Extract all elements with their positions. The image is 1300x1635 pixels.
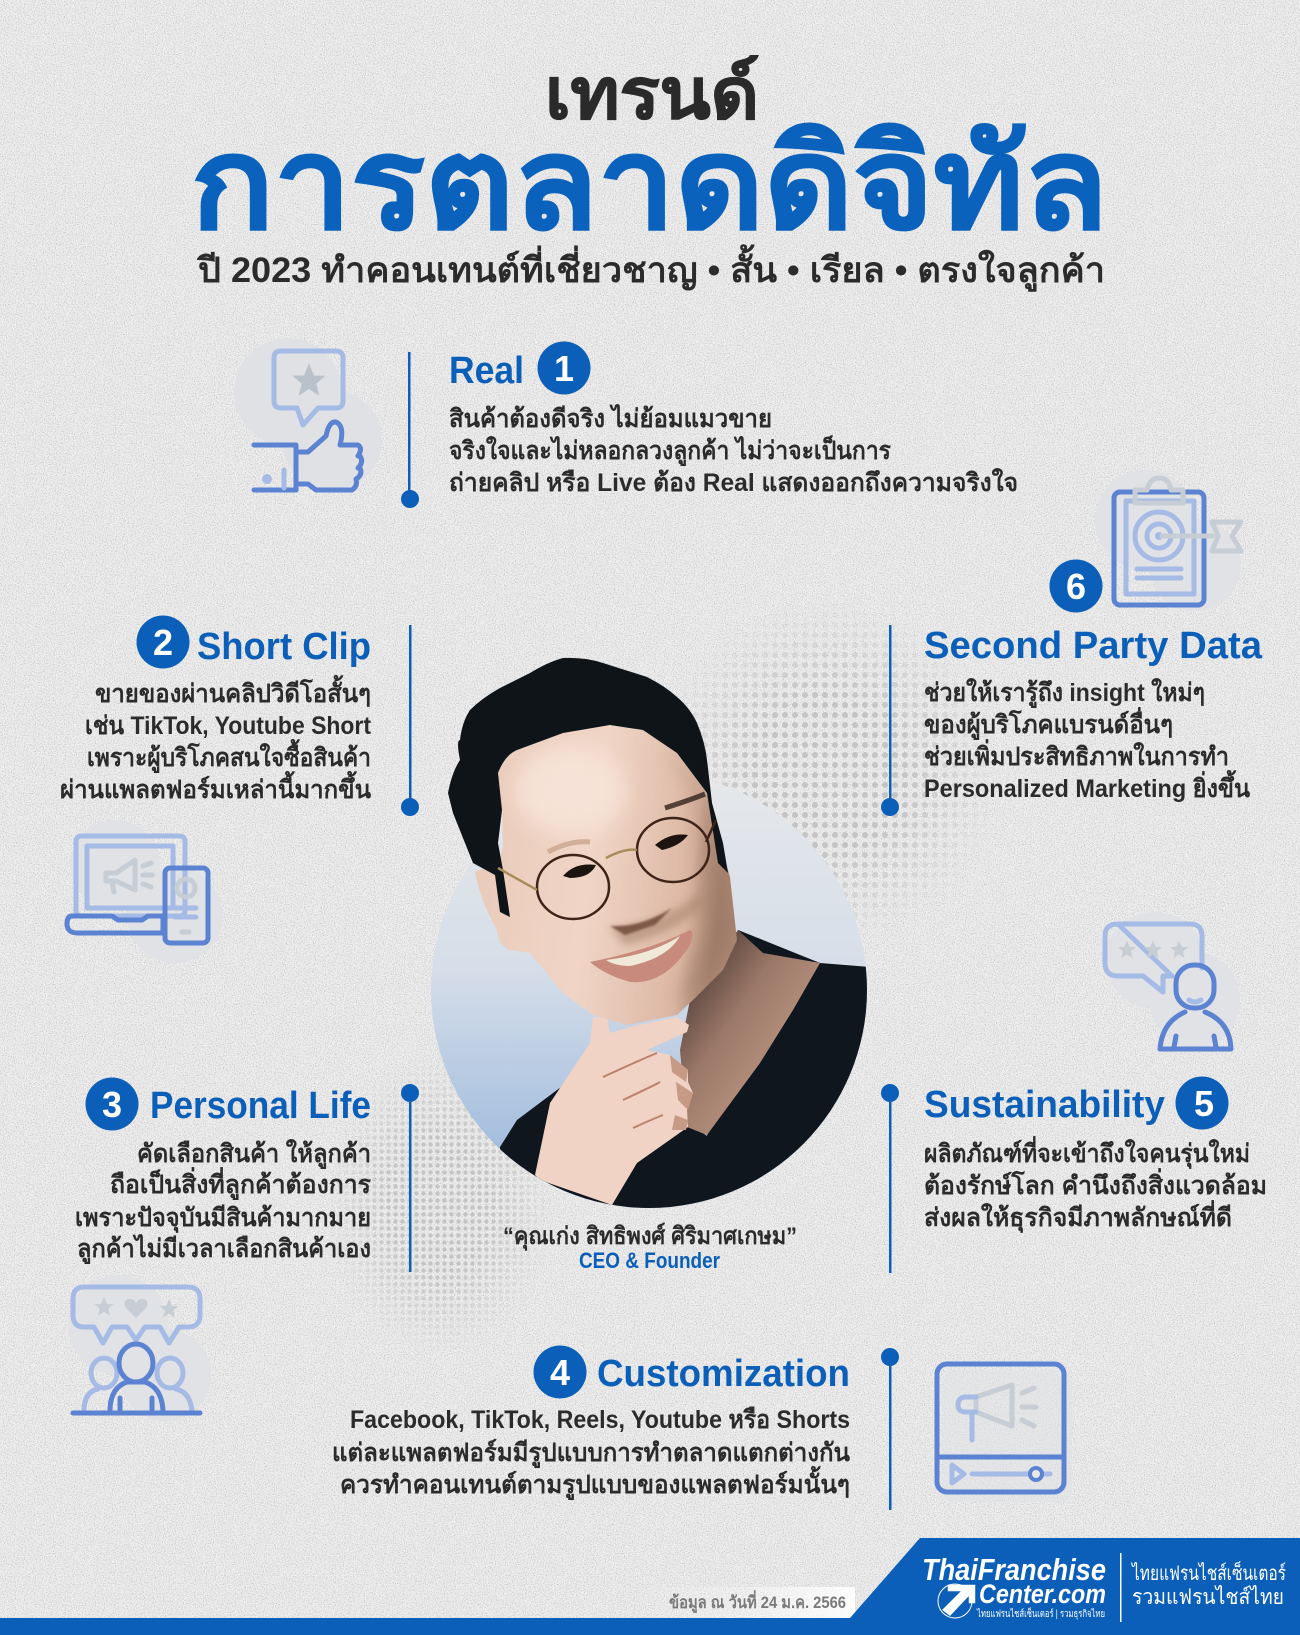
body text: ผ่านแพลตฟอร์มเหล่านี้มากขึ้น — [60, 770, 371, 804]
number badge — [86, 1078, 138, 1130]
source strip — [640, 1587, 855, 1618]
source text: ข้อมูล ณ วันที่ 24 ม.ค. 2566 — [669, 1590, 846, 1614]
body text — [332, 1406, 850, 1501]
photo caption — [503, 1222, 797, 1273]
connector line — [881, 625, 899, 816]
shirt, neck and hand — [500, 930, 870, 1215]
body text — [924, 677, 1250, 803]
body text: ต้องรักษ์โลก คำนึงถึงสิ่งแวดล้อม — [924, 1168, 1267, 1200]
heading: Sustainability — [924, 1084, 1165, 1126]
body text: ผลิตภัณฑ์ที่จะเข้าถึงใจคนรุ่นใหม่ — [924, 1136, 1250, 1170]
footer band — [0, 1538, 1300, 1635]
gradient circle backdrop — [431, 772, 867, 1208]
body text: ควรทำคอนเทนต์ตามรูปแบบของแพลตฟอร์มนั้นๆ — [340, 1465, 850, 1501]
body text: คัดเลือกสินค้า ให้ลูกค้า — [137, 1138, 371, 1170]
body text: แต่ละแพลตฟอร์มมีรูปแบบการทำตลาดแตกต่างกัน — [332, 1438, 850, 1469]
panel: 5 Sustainability — [881, 912, 1267, 1273]
title line 2: การตลาดดิจิทัล — [191, 113, 1108, 256]
number badge: 4 — [550, 1352, 570, 1393]
body text — [75, 1138, 372, 1265]
number badge: 2 — [153, 622, 173, 663]
nose — [610, 908, 672, 935]
logo: Center.com — [979, 1579, 1106, 1609]
body text: สินค้าต้องดีจริง ไม่ย้อมแมวขาย — [449, 403, 772, 433]
body text — [924, 1136, 1267, 1234]
connector line — [401, 625, 419, 816]
title line 1: เทรนด์ — [545, 55, 759, 133]
connector line — [401, 352, 419, 508]
logo — [922, 1552, 1106, 1620]
number badge: 3 — [102, 1084, 122, 1125]
body text: ขายของผ่านคลิปวิดีโอสั้นๆ — [95, 674, 371, 708]
panel: 3 Personal Life — [68, 1078, 419, 1421]
number badge — [538, 342, 590, 394]
person name: “คุณเก่ง สิทธิพงศ์ ศิริมาศเกษม” — [503, 1222, 797, 1252]
body text — [449, 403, 1018, 497]
body text: ส่งผลให้ธุรกิจมีภาพลักษณ์ที่ดี — [924, 1200, 1232, 1234]
number badge — [534, 1346, 586, 1398]
tagline — [1130, 1560, 1286, 1609]
body text: ช่วยเพิ่มประสิทธิภาพในการทำ — [924, 739, 1229, 771]
heading: Short Clip — [197, 626, 371, 668]
connector line — [881, 1084, 899, 1273]
logo: ไทยแฟรนไชส์เซ็นเตอร์ | รวมธุรกิจไทย — [976, 1606, 1105, 1620]
face — [475, 725, 737, 1025]
hair — [448, 658, 728, 917]
subtitle: ปี 2023 ทำคอนเทนต์ที่เชี่ยวชาญ • สั้น • เรียล • ตรงใจลูกค้า — [197, 244, 1105, 292]
body text: Facebook, TikTok, Reels, Youtube หรือ Shorts — [350, 1406, 850, 1434]
panel: 4 Customization — [332, 1346, 1072, 1510]
body text: เพราะปัจจุบันมีสินค้ามากมาย — [75, 1204, 371, 1234]
heading: Personal Life — [150, 1085, 371, 1127]
body text: ถ่ายคลิป หรือ Live ต้อง Real แสดงออกถึงความจริงใจ — [449, 467, 1018, 497]
icon: video megaphone — [937, 1364, 1072, 1502]
eyes and brows — [548, 794, 705, 878]
icon: clipboard target — [1095, 470, 1241, 611]
number badge: 6 — [1066, 566, 1086, 607]
body text — [60, 674, 372, 804]
body text: Personalized Marketing ยิ่งขึ้น — [924, 769, 1250, 803]
body text: ถือเป็นสิ่งที่ลูกค้าต้องการ — [110, 1167, 372, 1201]
icon: person with rating bubble — [1105, 912, 1240, 1049]
heading: Real — [449, 350, 524, 392]
panel: 2 Short Clip — [60, 616, 419, 963]
logo: ThaiFranchise — [922, 1552, 1106, 1587]
body text: เช่น TikTok, Youtube Short — [85, 712, 372, 740]
icon: laptop and phone — [67, 820, 223, 963]
title — [191, 55, 1108, 292]
number badge — [136, 616, 190, 668]
tagline: รวมแฟรนไชส์ไทย — [1132, 1585, 1284, 1609]
photo: CEO portrait — [431, 658, 870, 1215]
connector line — [881, 1348, 899, 1510]
panel: 6 Second Party Data — [881, 470, 1263, 816]
divider — [1120, 1553, 1122, 1622]
body text: เพราะผู้บริโภคสนใจซื้อสินค้า — [87, 738, 371, 774]
body text: ลูกค้าไม่มีเวลาเลือกสินค้าเอง — [77, 1233, 371, 1265]
heading: Customization — [597, 1353, 850, 1395]
body text: ของผู้บริโภคแบรนด์อื่นๆ — [924, 707, 1173, 741]
number badge — [1176, 1076, 1228, 1130]
mouth — [590, 930, 692, 982]
body text: จริงใจและไม่หลอกลวงลูกค้า ไม่ว่าจะเป็นการ — [449, 435, 892, 467]
body text: ช่วยให้เรารู้ถึง insight ใหม่ๆ — [924, 677, 1205, 709]
number badge: 5 — [1194, 1083, 1214, 1124]
connector line — [401, 1084, 419, 1272]
role: CEO & Founder — [579, 1248, 720, 1273]
number badge — [1050, 560, 1102, 612]
icon: audience with feedback bubble — [68, 1275, 211, 1421]
glasses — [498, 818, 716, 919]
icon: thumbs up — [234, 338, 382, 490]
blue band — [0, 1538, 1300, 1635]
heading: Second Party Data — [924, 625, 1263, 667]
number badge: 1 — [554, 348, 574, 389]
panel: 1 Real — [234, 338, 1018, 508]
